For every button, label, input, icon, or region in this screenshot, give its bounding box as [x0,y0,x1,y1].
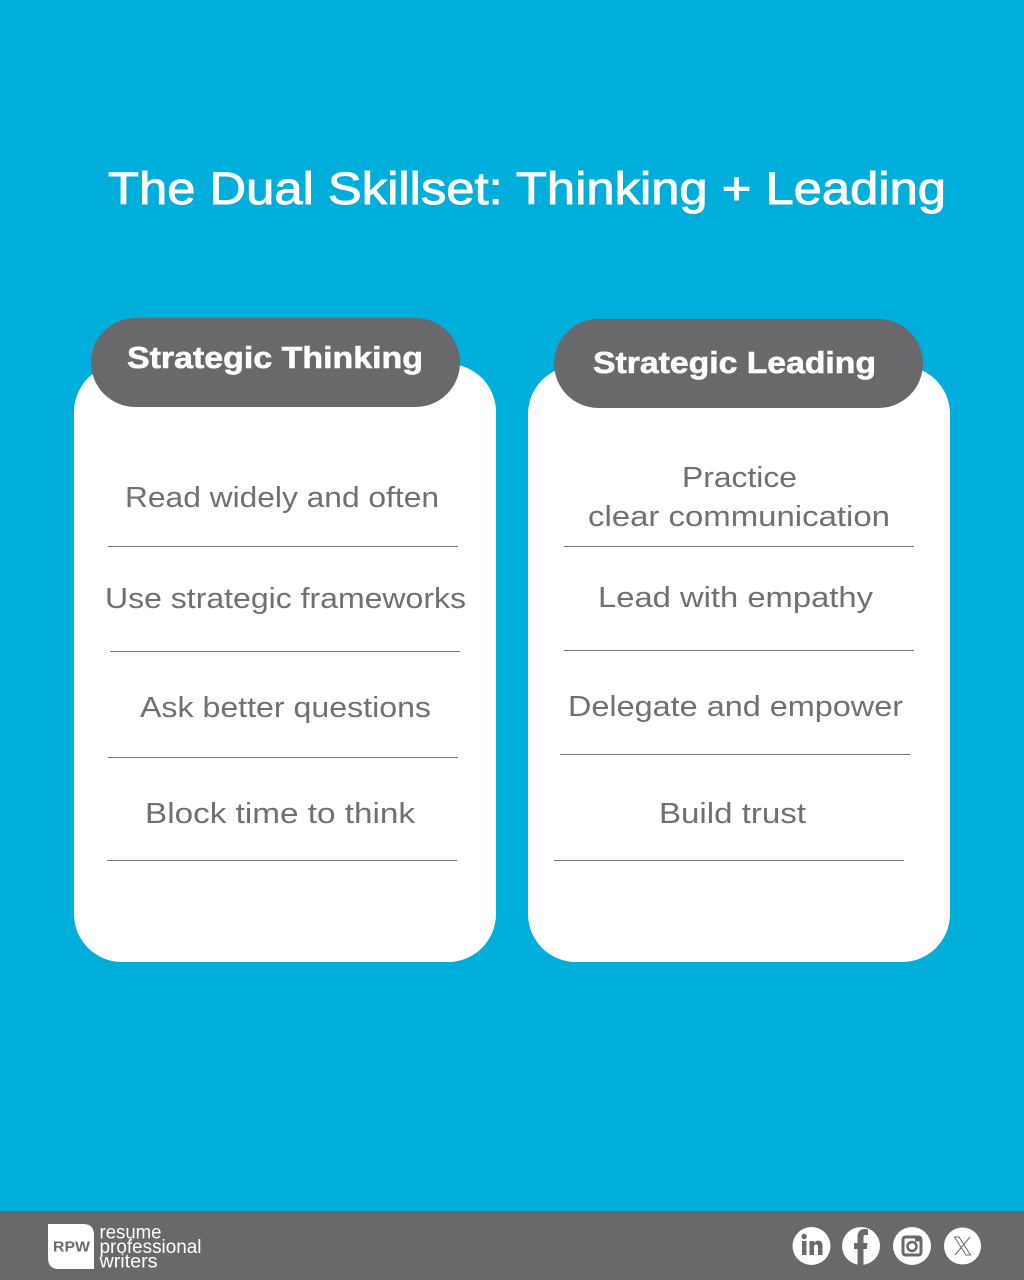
logo: RPW: professional [100,1237,202,1258]
panel: strategic thinking [74,318,496,962]
item: empathy: Lead with empathy [598,582,874,614]
item: practice clear communication: Practice [682,462,797,494]
logo: RPW: RPW [53,1240,90,1256]
logo: RPW: writers [98,1252,158,1272]
item: practice clear communication: clear communication [588,501,890,533]
card: strategic thinking [74,364,496,962]
item: questions: Ask better questions [140,692,431,724]
item: practice clear communication [588,462,890,533]
footer bar [0,1211,1024,1280]
item: build trust: Build trust [659,798,806,830]
heading: strategic leading: Strategic Leading [593,345,876,380]
logo: RPW: resume [100,1222,162,1244]
heading: strategic thinking: Strategic Thinking [127,340,423,375]
logo: RPW [48,1222,202,1272]
icon: facebook [842,1227,880,1265]
icon: instagram [893,1227,931,1265]
item: frameworks: Use strategic frameworks [105,583,466,615]
heading: strategic thinking [91,318,460,407]
icon: linkedin [792,1227,830,1265]
item: delegate: Delegate and empower [568,691,903,723]
item: read widely: Read widely and often [125,482,439,514]
heading: strategic leading [554,319,923,408]
icon: x [944,1228,981,1264]
card: strategic leading [528,366,950,962]
panel: strategic leading [528,319,950,962]
item: block time: Block time to think [145,798,416,830]
title: The Dual Skillset: Thinking + Leading [108,163,946,214]
